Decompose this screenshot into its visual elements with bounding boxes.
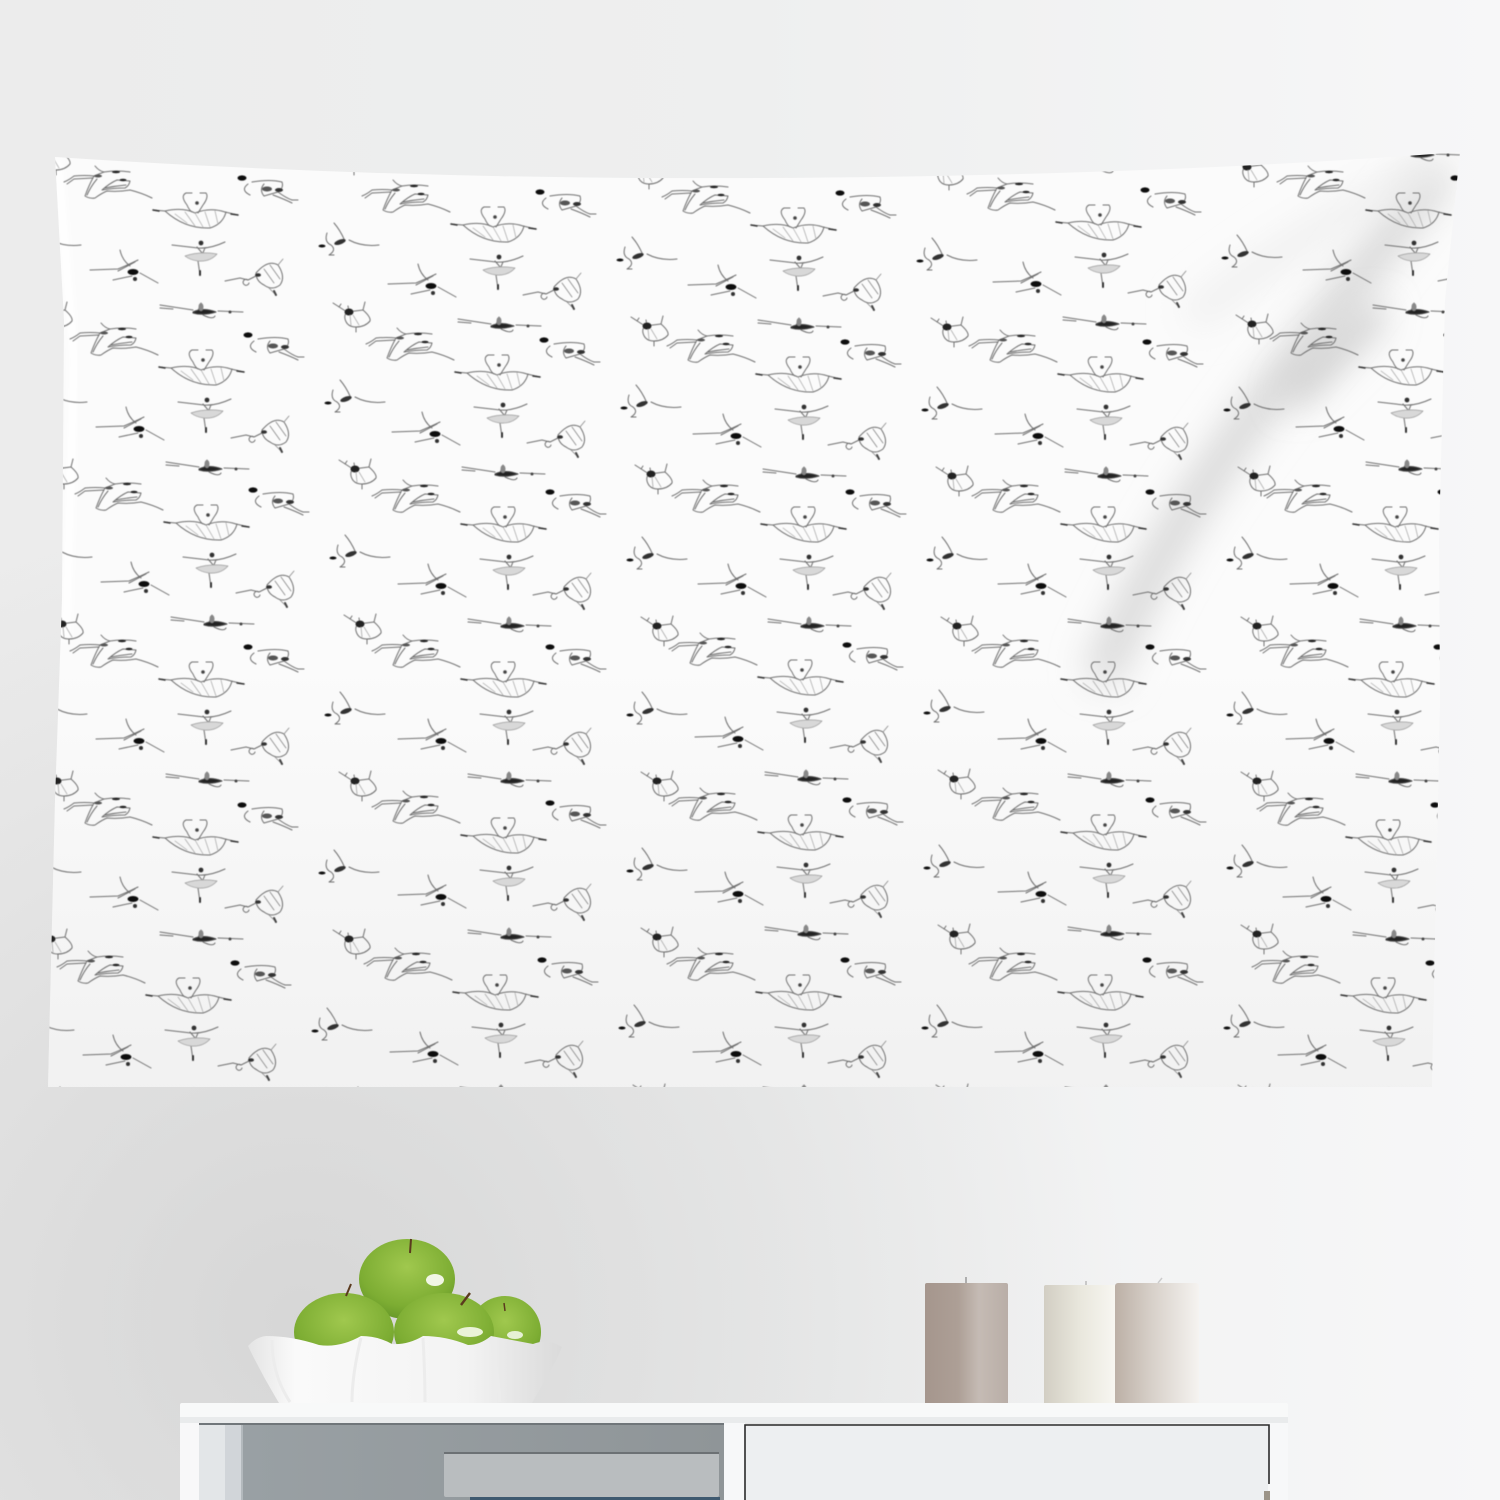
candle 2 bbox=[1044, 1281, 1117, 1405]
apple: back right bbox=[469, 1296, 541, 1368]
cabinet left post bbox=[180, 1422, 199, 1500]
dancer pattern row 2 bbox=[0, 323, 1500, 496]
white cabinet bbox=[180, 1403, 1288, 1500]
tapestry cloth bbox=[48, 153, 1460, 1087]
apple: top bbox=[359, 1239, 455, 1319]
dancer pattern row 1 bbox=[0, 166, 1500, 347]
tapestry shadow bbox=[50, 1088, 1432, 1092]
candles bbox=[925, 1277, 1199, 1405]
apple: left bbox=[294, 1284, 394, 1371]
dancer pattern row 5 bbox=[0, 788, 1500, 959]
candle 1 bbox=[925, 1277, 1008, 1405]
book bbox=[444, 1452, 720, 1500]
drawer front bbox=[745, 1425, 1270, 1500]
dancer pattern row 3 bbox=[0, 478, 1500, 646]
dancer pattern row 6 bbox=[50, 947, 1434, 1087]
apples bbox=[294, 1239, 541, 1371]
dancer pattern row 4 bbox=[0, 633, 1500, 801]
cabinet open shelf interior bbox=[199, 1422, 724, 1500]
cabinet centre post bbox=[724, 1422, 745, 1500]
cabinet top bbox=[180, 1403, 1288, 1423]
tapestry bbox=[48, 153, 1460, 1087]
candle 3 bbox=[1115, 1278, 1199, 1405]
apple: front bbox=[394, 1293, 494, 1371]
white scalloped bowl bbox=[248, 1336, 562, 1403]
dancer pattern row 0 bbox=[55, 153, 1460, 191]
cabinet right post bbox=[1268, 1422, 1288, 1500]
